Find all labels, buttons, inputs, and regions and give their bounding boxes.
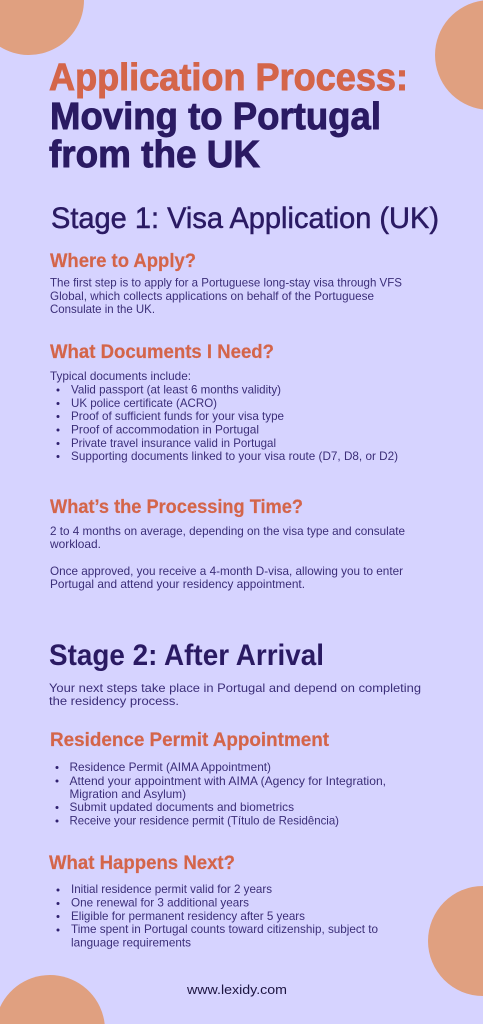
heading: residence permit appointment: Residence Permit Appointment	[50, 729, 329, 751]
title: Moving to Portugal	[50, 96, 381, 138]
list: next steps: language requirements	[71, 936, 191, 950]
decorative circle: top left	[0, 0, 84, 55]
text block: where to apply	[50, 276, 402, 316]
section: what happens next	[49, 852, 378, 950]
text block: processing time: 2 to 4 months on average, depending on the visa type and consulate	[50, 524, 405, 538]
title: from the UK	[49, 134, 261, 176]
list: residence permit steps: Migration and Asylum)	[70, 787, 186, 801]
heading: processing time: What’s the Processing Time?	[50, 496, 303, 518]
text block: where to apply: Global, which collects applications on behalf of the Portuguese	[50, 289, 374, 303]
heading: what happens next: What Happens Next?	[49, 852, 235, 874]
text block: processing time: workload.	[49, 537, 101, 551]
list: documents: Supporting documents linked to your visa route (D7, D8, or D2)	[71, 449, 398, 463]
heading: stage 2: Stage 2: After Arrival	[49, 639, 324, 672]
list: documents: Proof of sufficient funds for your visa type	[71, 409, 284, 423]
list: residence permit steps: Submit updated documents and biometrics	[70, 800, 294, 814]
text block: stage 2 intro: the residency process.	[49, 694, 179, 708]
list: documents: Valid passport (at least 6 months validity)	[71, 382, 281, 396]
list: documents: Proof of accommodation in Portugal	[71, 422, 259, 436]
list: residence permit steps: Receive your residence permit (Título de Residência)	[70, 814, 339, 828]
text: documents intro: Typical documents include:	[50, 369, 191, 383]
text block: processing time: Once approved, you receive a 4-month D-visa, allowing you to enter	[50, 564, 403, 578]
list: documents: UK police certificate (ACRO)	[71, 396, 217, 410]
heading: where to apply: Where to Apply?	[50, 250, 196, 272]
section: documents	[50, 341, 398, 463]
section: residence permit appointment	[50, 729, 386, 828]
heading: stage 1: Stage 1: Visa Application (UK)	[51, 202, 439, 235]
list: next steps: Initial residence permit valid for 2 years	[71, 882, 272, 896]
decorative circle: bottom left	[0, 975, 105, 1024]
text block: where to apply: Consulate in the UK.	[50, 302, 155, 316]
list: next steps: Eligible for permanent residency after 5 years	[71, 909, 305, 923]
list: residence permit steps	[56, 760, 386, 828]
text block: where to apply: The first step is to apply for a Portuguese long-stay visa through VFS	[50, 276, 402, 290]
website url: www.lexidy.com	[186, 982, 287, 997]
list: residence permit steps: Attend your appointment with AIMA (Agency for Integration,	[70, 774, 386, 788]
section: processing time	[49, 496, 405, 591]
heading: documents: What Documents I Need?	[50, 341, 274, 363]
list: residence permit steps: Residence Permit (AIMA Appointment)	[70, 760, 271, 774]
list: next steps	[56, 882, 378, 950]
text block: processing time	[49, 524, 405, 591]
text block: stage 2 intro	[49, 681, 421, 708]
text block: stage 2 intro: Your next steps take place in Portugal and depend on completing	[49, 681, 421, 695]
list: documents: Private travel insurance valid in Portugal	[71, 436, 276, 450]
section: where to apply	[50, 250, 402, 316]
list: next steps: Time spent in Portugal counts toward citizenship, subject to	[71, 922, 378, 936]
list: documents	[56, 382, 398, 463]
list: next steps: One renewal for 3 additional years	[71, 896, 249, 910]
title	[49, 57, 408, 176]
text block: processing time: Portugal and attend your residency appointment.	[50, 577, 305, 591]
decorative circle: bottom right	[428, 886, 483, 996]
title: Application Process:	[49, 57, 408, 99]
decorative circle: top right	[435, 0, 483, 110]
